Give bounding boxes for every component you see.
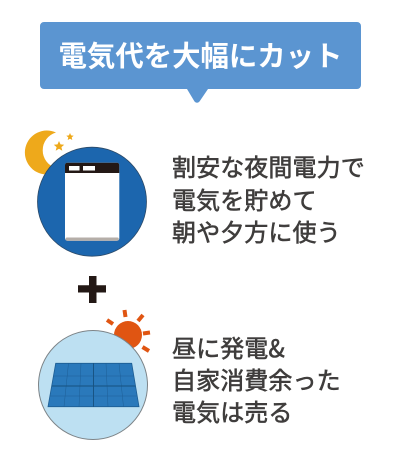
banner bubble <box>40 22 361 103</box>
title: 電気代を大幅にカット <box>59 34 342 75</box>
text block: solar power: 自家消費余った <box>172 361 341 396</box>
text block: storage battery <box>172 148 365 248</box>
icon: blue circle with battery <box>38 147 146 256</box>
text block: storage battery: 電気を貯めて <box>172 180 317 216</box>
icon: sun <box>107 310 150 351</box>
text block: storage battery: 割安な夜間電力で <box>172 148 365 183</box>
text block: storage battery: 朝や夕方に使う <box>172 213 341 248</box>
icon: plus sign <box>78 276 106 303</box>
text block: solar power: 電気は売る <box>172 393 292 428</box>
icon: light blue circle with solar panel <box>38 330 148 440</box>
text block: solar power: 昼に発電& <box>172 329 285 364</box>
icon: moon and stars <box>25 131 74 174</box>
text block: solar power <box>172 329 341 428</box>
